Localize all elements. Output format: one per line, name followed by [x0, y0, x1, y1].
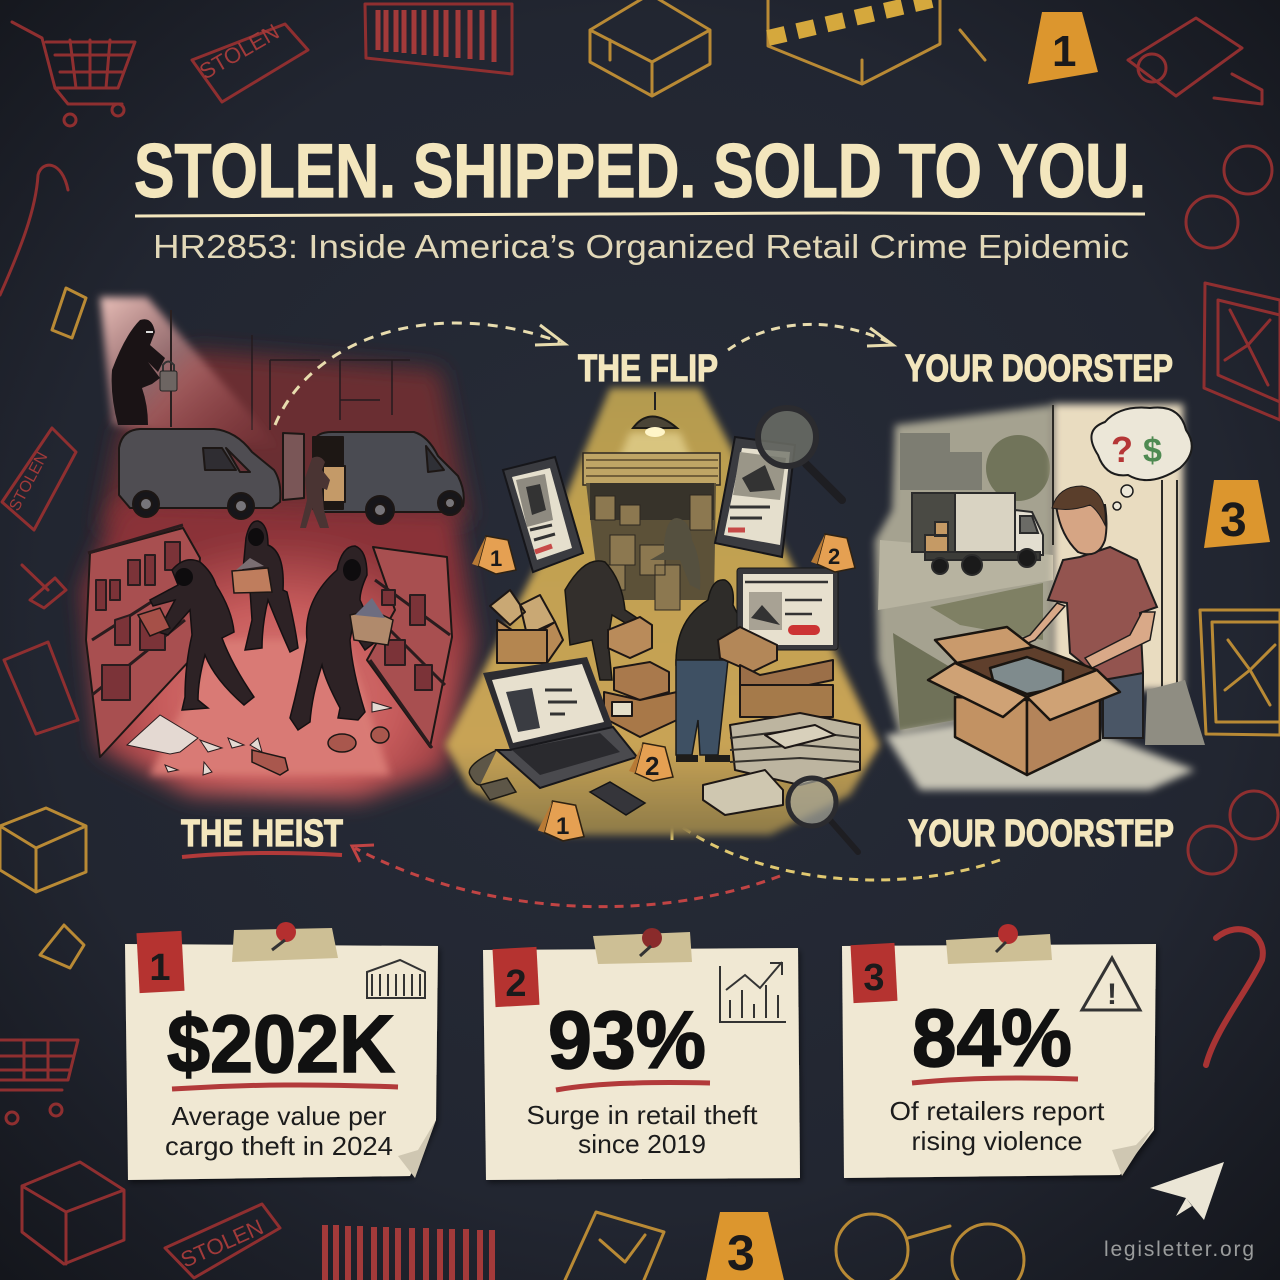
icon: evidence marker 3 right: 3: [1220, 494, 1247, 547]
monitor: [737, 568, 838, 650]
icon: stolen tag bottom: STOLEN: [177, 1214, 267, 1273]
tree: [986, 435, 1050, 501]
man: [1008, 486, 1157, 738]
thought bubble: [1091, 407, 1192, 510]
ceiling lamp: [633, 392, 677, 437]
icon: parcel top: [590, 0, 710, 96]
website credit: legisletter.org: [1104, 1238, 1254, 1261]
hair: [1052, 486, 1105, 525]
paper: [483, 948, 800, 1180]
label: Of retailers report: [890, 1096, 1105, 1126]
arms: [1008, 603, 1155, 668]
icon: evidence marker 3 bottom: 3: [727, 1225, 755, 1280]
house wall: [1053, 404, 1183, 690]
phone left: [503, 457, 583, 572]
badge 2: [493, 947, 539, 1007]
table of boxes: [740, 660, 833, 717]
icon: stolen tag bottom: [165, 1204, 280, 1278]
tape: [593, 932, 692, 964]
pin: [640, 928, 662, 956]
pin: [996, 924, 1018, 952]
worker in back: [565, 561, 640, 680]
dark red wall: [100, 350, 470, 530]
value: 84%: [912, 993, 1072, 1084]
icon: price tag left: [52, 288, 86, 338]
label: cargo theft in 2024: [165, 1131, 393, 1161]
robber centre with box: [232, 521, 298, 652]
label: Surge in retail theft: [526, 1100, 758, 1130]
padlock: [160, 362, 177, 391]
subtitle: HR2853: Inside America’s Organized Retail Crime Epidemic: [153, 228, 1129, 265]
pin: [272, 922, 296, 950]
panel: your doorstep scene: [875, 404, 1205, 790]
icon: broken window right: [1200, 610, 1280, 735]
stat card 3: [842, 924, 1156, 1178]
laptop: [483, 657, 637, 788]
page curl: [398, 1120, 436, 1178]
evidence markers: 2: [645, 751, 659, 781]
heading: your doorstep top: YOUR DOORSTEP: [905, 348, 1173, 390]
paper: [842, 944, 1156, 1178]
icon: crowbar right: [1206, 929, 1263, 1065]
icon: taped box top: [768, 0, 985, 84]
lurking burglar at lock: [112, 319, 165, 425]
mouse and cable: [469, 750, 516, 800]
tape: [232, 928, 338, 962]
jeans: [1103, 672, 1143, 738]
outdoor wash background: [875, 405, 1053, 735]
lamp cone highlight: [610, 432, 700, 480]
hooded worker: [676, 580, 760, 762]
worker back right: [650, 518, 700, 590]
road: [878, 540, 1053, 610]
icon: rising chart: [720, 962, 786, 1022]
small phone: [590, 782, 645, 815]
icon: stolen tag left: STOLEN: [7, 450, 51, 514]
icon: phone left: [4, 642, 78, 734]
icon: evidence marker 1 top: 1: [1052, 27, 1076, 76]
badge 3: [851, 943, 897, 1003]
icon: cracked phone bottom: [565, 1212, 664, 1280]
icon: warning triangle: !: [1107, 978, 1117, 1011]
arrow: flip to doorstep: [728, 324, 893, 350]
icon: paper plane logo: [1150, 1162, 1224, 1220]
icon: stolen tag left: [2, 428, 76, 530]
panel: the heist scene: [82, 297, 475, 800]
icon: stolen tag top left: STOLEN: [195, 19, 283, 84]
icon: security camera: [1128, 18, 1262, 104]
thought bubble: $: [1143, 432, 1162, 470]
robber left bending: [138, 560, 254, 710]
heading: the heist: THE HEIST: [181, 813, 343, 855]
magnifier bottom: [788, 778, 858, 852]
box stack front: [604, 662, 677, 737]
phone right: [715, 437, 795, 557]
evidence markers: 1: [490, 546, 502, 571]
open carton left: [490, 590, 563, 663]
paper: [125, 944, 438, 1180]
icon: handcuffs bottom: [836, 1214, 1024, 1280]
thought bubble: ?: [1111, 429, 1133, 470]
tape: [946, 934, 1052, 964]
van right: [283, 432, 464, 524]
worker box: [608, 617, 652, 658]
evidence markers: 1: [556, 813, 569, 840]
robber right with loot: [290, 546, 393, 730]
icon: handcuffs right: [1188, 791, 1278, 874]
stat card 1: [125, 922, 438, 1180]
icon: shipping container: [367, 960, 425, 998]
badge 3: 3: [863, 957, 885, 999]
magnifier top: [758, 408, 842, 500]
icon: stolen tag top left: [192, 19, 308, 102]
icon: cart left lower: [0, 1040, 78, 1124]
icon: shopping cart top left: [12, 22, 135, 126]
badge 1: 1: [149, 947, 171, 989]
underline: [912, 1078, 1078, 1083]
open cardboard box: [928, 627, 1120, 775]
icon: evidence marker 3 bottom: [706, 1212, 784, 1280]
evidence markers: [472, 534, 855, 841]
stat card 2: [483, 928, 800, 1180]
stacks of merchandise: [703, 713, 860, 815]
label: since 2019: [578, 1129, 706, 1159]
underline: [172, 1085, 398, 1089]
ground: [885, 710, 1195, 790]
value: $202K: [167, 999, 395, 1090]
arrow: back to heist: [352, 845, 780, 907]
panel: the flip scene: [445, 388, 880, 852]
value: 93%: [548, 995, 706, 1086]
red floor splash: [82, 500, 475, 800]
thief loading van: [300, 457, 330, 528]
label: Average value per: [172, 1101, 387, 1131]
icon: handcuffs right top: [1186, 146, 1272, 248]
icon: box bottom left: [22, 1162, 124, 1264]
underline: [556, 1083, 710, 1090]
door frame: [1053, 405, 1177, 690]
lawn left: [893, 633, 955, 730]
wall lines: [252, 335, 410, 430]
arrow: heist to flip: [275, 323, 565, 425]
icon: plunger left: [22, 565, 66, 608]
arrow: doorstep to flip: [672, 820, 1000, 880]
debris: [127, 702, 392, 775]
hood box: [718, 627, 777, 672]
heading: the flip: THE FLIP: [578, 348, 718, 390]
icon: barcode top: [365, 4, 512, 74]
buildings: [900, 433, 982, 490]
icon: warning triangle: [1082, 958, 1140, 1011]
van left: [119, 429, 280, 519]
page curl: [1112, 1126, 1154, 1176]
title underline: [135, 213, 1145, 216]
icon: evidence marker 1 top: [1028, 12, 1098, 84]
yellow spotlight triangle: [445, 388, 880, 835]
warehouse door: [583, 453, 720, 610]
icon: barcode bottom: [325, 1225, 492, 1280]
light beam: [100, 297, 282, 450]
badge 2: 2: [505, 963, 527, 1005]
store shelves left: [86, 525, 200, 757]
head: [1056, 505, 1106, 554]
icon: broken window top right: [1204, 283, 1280, 420]
badge 1: [136, 931, 185, 993]
lock pole: [170, 310, 172, 427]
heading: your doorstep bottom: YOUR DOORSTEP: [908, 813, 1174, 855]
icon: box left: [0, 808, 86, 892]
evidence markers: 2: [828, 544, 840, 569]
doorstep: [1145, 680, 1205, 745]
fallen items: [252, 727, 389, 775]
lawn: [930, 583, 1043, 640]
floor glow: [150, 640, 390, 775]
delivery truck: [912, 493, 1043, 575]
icon: bell left: [40, 925, 84, 968]
shirt: [1048, 547, 1157, 680]
label: rising violence: [912, 1126, 1082, 1156]
robbers: [138, 521, 393, 730]
icon: evidence marker 3 right: [1204, 480, 1270, 548]
store shelves right: [367, 547, 452, 748]
icon: crowbar left: [0, 165, 68, 295]
